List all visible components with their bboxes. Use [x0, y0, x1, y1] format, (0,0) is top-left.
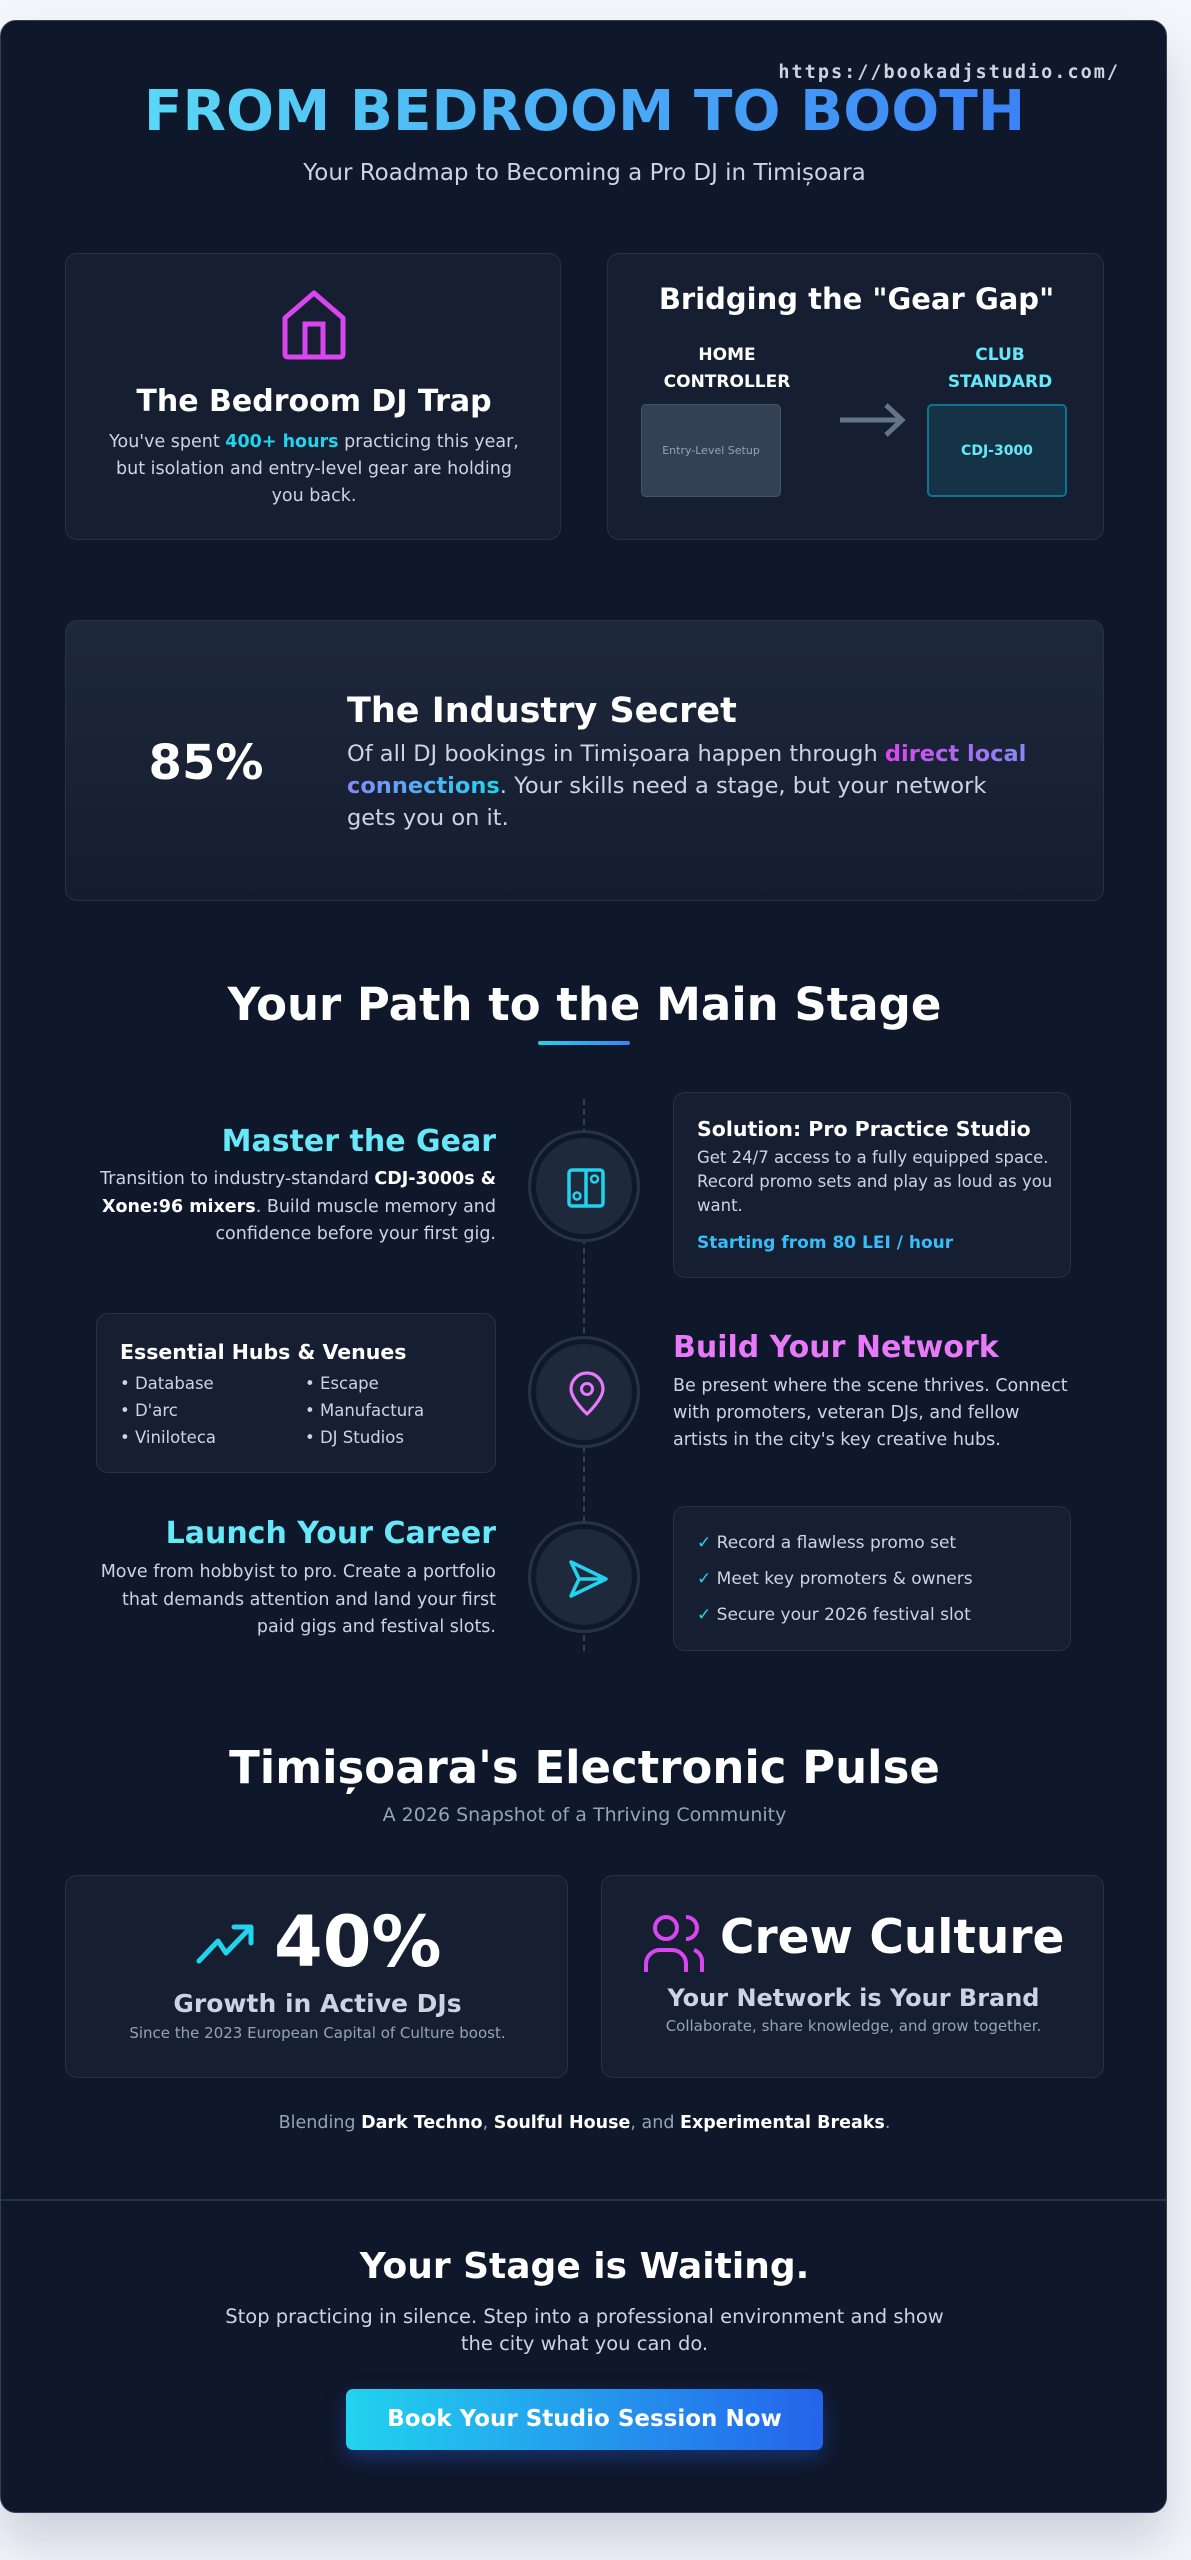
- heading: pulse: Timișoara's Electronic Pulse: [229, 1741, 940, 1794]
- note: Since the 2023 European Capital of Culture boost.: [129, 2024, 506, 2042]
- title: Solution: Pro Practice Studio: [697, 1117, 1031, 1141]
- text: Move from hobbyist to pro. Create a portfolio that demands attention and land your first paid gigs and festival slots.: [101, 1562, 496, 1637]
- heading: The Industry Secret: [347, 691, 737, 731]
- cta heading: Your Stage is Waiting.: [360, 2246, 809, 2287]
- panel: bedroom dj trap: [65, 253, 561, 540]
- text: You've spent 400+ hours practicing this year, but isolation and entry-level gear are holding you back.: [109, 432, 519, 506]
- icon: circle mixer: [528, 1130, 640, 1242]
- text: Of all DJ bookings in Timișoara happen through direct local connections. Your skills need a stage, but your network gets you on it.: [347, 741, 1026, 831]
- box: cdj: [927, 404, 1067, 497]
- list col2: [305, 1374, 424, 1447]
- stat: 40%: [274, 1901, 442, 1983]
- text: Get 24/7 access to a fully equipped space. Record promo sets and play as loud as you want.: [697, 1148, 1052, 1215]
- step 2: [96, 1313, 1068, 1473]
- heading: The Bedroom DJ Trap: [136, 384, 492, 419]
- heading: path: Your Path to the Main Stage: [228, 978, 941, 1031]
- list: ✓ Meet key promoters & owners: [697, 1569, 973, 1589]
- panel: checklist: [673, 1506, 1071, 1651]
- label home: [664, 345, 790, 392]
- panel: hubs: [96, 1313, 496, 1473]
- box: cdj: CDJ-3000: [961, 442, 1033, 458]
- label home: HOME: [698, 345, 756, 365]
- heading: Master the Gear: [222, 1124, 496, 1159]
- label: Growth in Active DJs: [173, 1989, 462, 2018]
- genres text: Blending Dark Techno, Soulful House, and Experimental Breaks.: [279, 2113, 890, 2133]
- step 3: [101, 1506, 1071, 1651]
- panel: crew: [601, 1875, 1104, 2078]
- list col2: • Manufactura: [305, 1401, 424, 1420]
- cta text: Stop practicing in silence. Step into a professional environment and show the city what you can do.: [225, 2305, 944, 2355]
- panel: industry secret: [65, 620, 1104, 901]
- label club: CLUB: [975, 345, 1025, 365]
- icon: house: [282, 290, 346, 360]
- timeline line: [583, 1099, 585, 1651]
- heading: Build Your Network: [673, 1330, 999, 1365]
- title: Essential Hubs & Venues: [120, 1340, 406, 1364]
- label home: CONTROLLER: [664, 372, 790, 392]
- icon: users: [644, 1915, 704, 1972]
- underline: [538, 1041, 630, 1045]
- list: ✓ Record a flawless promo set: [697, 1533, 956, 1553]
- subtitle: Your Roadmap to Becoming a Pro DJ in Timișoara: [303, 160, 866, 186]
- label: Your Network is Your Brand: [668, 1984, 1040, 2012]
- label club: STANDARD: [948, 372, 1052, 392]
- button: [346, 2389, 823, 2450]
- list col1: • D'arc: [120, 1401, 178, 1420]
- icon: pin circle: [528, 1336, 640, 1448]
- panel: gear gap: [607, 253, 1104, 540]
- box: entry: Entry-Level Setup: [662, 444, 760, 457]
- panel: solution: [673, 1092, 1071, 1278]
- note: Collaborate, share knowledge, and grow together.: [666, 2017, 1041, 2035]
- list: [697, 1533, 973, 1625]
- icon: send circle: [528, 1521, 640, 1633]
- text: Be present where the scene thrives. Connect with promoters, veteran DJs, and fellow artists in the city's key creative hubs.: [673, 1376, 1068, 1450]
- label club: [948, 345, 1052, 392]
- subtitle: A 2026 Snapshot of a Thriving Community: [383, 1804, 786, 1826]
- arrow: [840, 403, 906, 437]
- button: Book Your Studio Session Now: [387, 2406, 782, 2432]
- list: ✓ Secure your 2026 festival slot: [697, 1605, 971, 1625]
- list col2: • DJ Studios: [305, 1428, 404, 1447]
- stat 85: 85%: [149, 735, 263, 791]
- list col1: [120, 1374, 216, 1447]
- list col2: • Escape: [305, 1374, 379, 1393]
- list col1: • Viniloteca: [120, 1428, 216, 1447]
- box: entry: [641, 404, 781, 497]
- panel: growth: [65, 1875, 568, 2078]
- title: FROM BEDROOM TO BOOTH: [144, 79, 1025, 144]
- list col1: • Database: [120, 1374, 214, 1393]
- price: Starting from 80 LEI / hour: [697, 1233, 953, 1253]
- text: Transition to industry-standard CDJ-3000s & Xone:96 mixers. Build muscle memory and confidence before your first gig.: [100, 1169, 496, 1244]
- icon: trend: [196, 1924, 254, 1964]
- step 1: [100, 1092, 1071, 1278]
- heading: Launch Your Career: [166, 1516, 496, 1551]
- heading: Crew Culture: [720, 1910, 1064, 1965]
- heading: Bridging the "Gear Gap": [659, 282, 1054, 316]
- url: https://bookadjstudio.com/: [778, 62, 1120, 83]
